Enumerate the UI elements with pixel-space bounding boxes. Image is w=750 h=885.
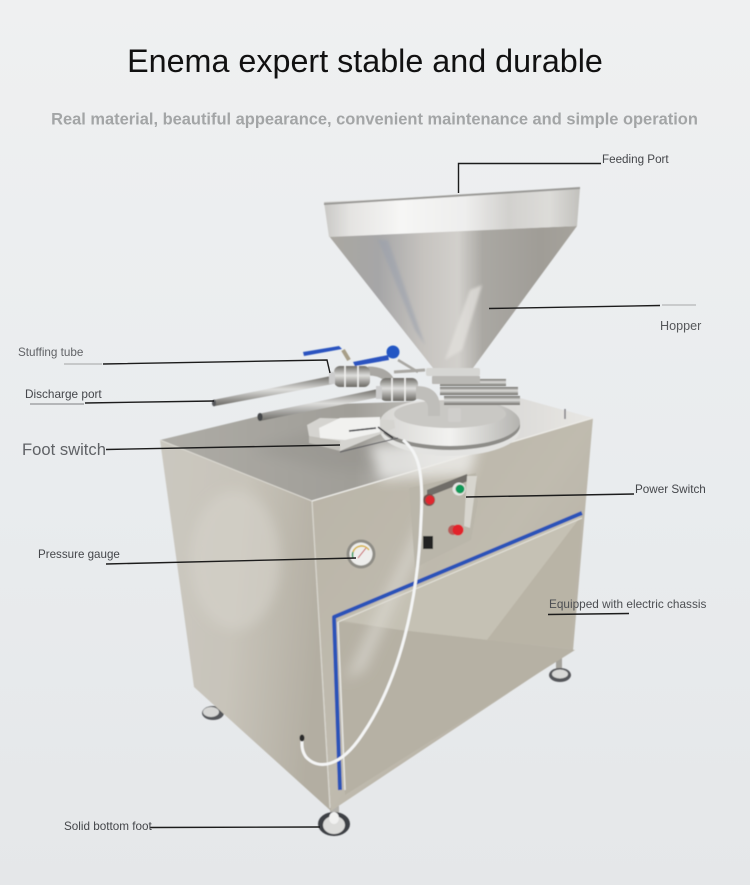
foot switch — [307, 417, 398, 452]
stuffing tube — [213, 376, 333, 406]
callout: Power Switch — [466, 483, 706, 497]
left face glare — [190, 490, 280, 630]
hopper collar — [426, 368, 480, 384]
glare streak — [345, 505, 440, 680]
hopper rim band — [324, 188, 580, 237]
callout: Equipped with electric chassis: Equipped with electric chassis — [549, 597, 706, 611]
cabinet right face — [312, 418, 593, 811]
discharge tube — [258, 389, 380, 421]
callout: Pressure gauge: Pressure gauge — [38, 548, 120, 561]
callout: Stuffing tube — [18, 346, 330, 373]
ball valves — [329, 366, 440, 416]
callout: Solid bottom foot: Solid bottom foot — [64, 820, 152, 833]
callout: Foot switch: Foot switch — [22, 440, 106, 459]
callout: Power Switch: Power Switch — [635, 483, 706, 496]
green indicator — [452, 482, 466, 496]
rear foot — [202, 706, 224, 720]
machine illustration — [160, 187, 593, 836]
callout: Feeding Port: Feeding Port — [602, 153, 669, 166]
cabinet left face — [160, 440, 331, 811]
rotary disc base — [380, 398, 520, 456]
red stop button — [448, 524, 464, 536]
callout: Hopper — [489, 304, 701, 333]
callout: Stuffing tube: Stuffing tube — [18, 346, 83, 359]
cabinet top face — [160, 398, 593, 501]
callout: Discharge port: Discharge port — [25, 387, 102, 401]
cabinet edge highlight — [312, 501, 330, 808]
blue valve handles — [303, 346, 418, 372]
title: Enema expert stable and durable — [127, 43, 603, 79]
right foot — [549, 658, 571, 682]
control panel — [409, 473, 478, 568]
blue door seal — [334, 513, 582, 790]
black switch — [423, 536, 433, 549]
hopper cone — [329, 226, 577, 368]
front foot — [318, 806, 350, 836]
callout: Hopper: Hopper — [660, 319, 701, 333]
red indicator — [423, 494, 435, 506]
white hose — [302, 440, 422, 764]
pressure gauge — [346, 540, 376, 568]
callout: Feeding Port — [458, 153, 669, 193]
horizontal manifold bars — [440, 379, 520, 422]
chassis door — [337, 515, 582, 795]
callout: Foot switch — [22, 440, 340, 459]
subtitle: Real material, beautiful appearance, convenient maintenance and simple operation — [51, 110, 698, 128]
callout: Pressure gauge — [38, 548, 356, 564]
